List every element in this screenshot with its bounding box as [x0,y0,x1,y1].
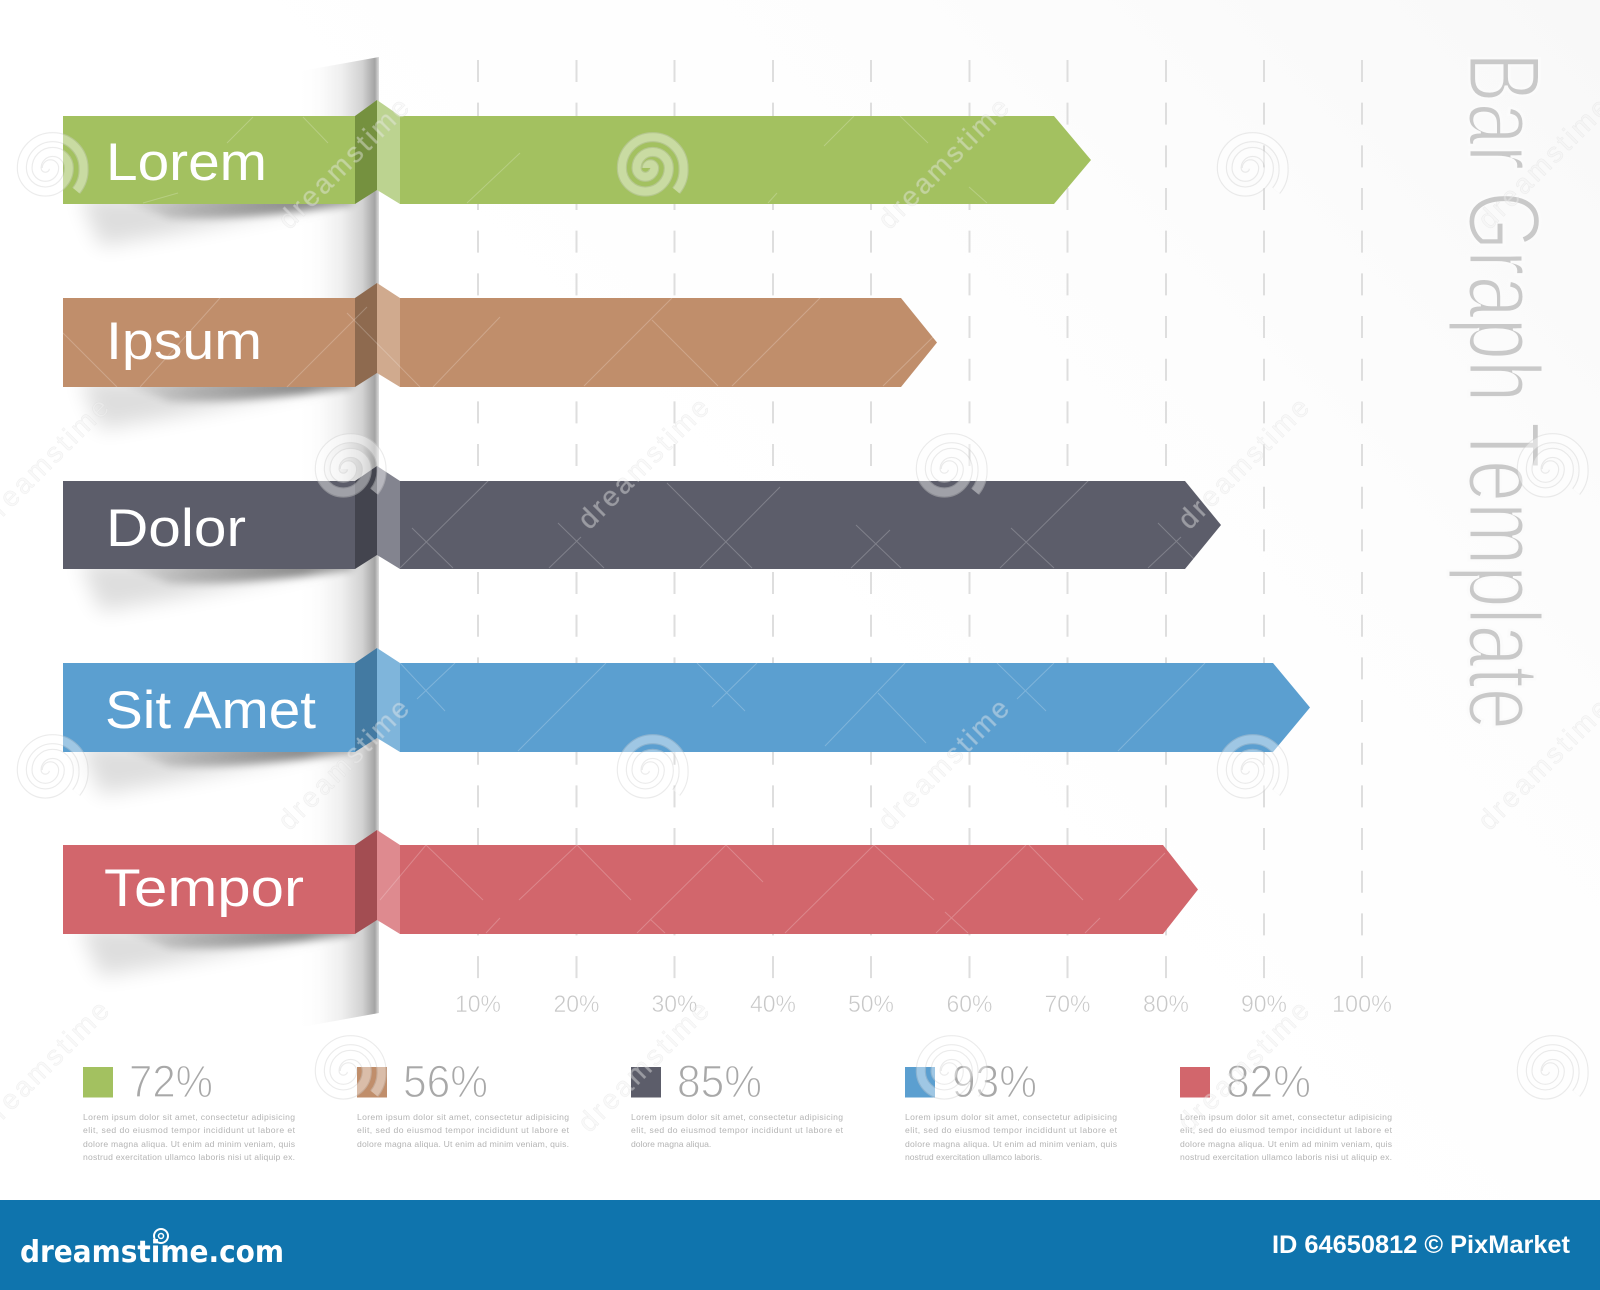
bar: Tempor 82%: Tempor [104,859,304,918]
watermark spirals and text: dreamstime [572,392,715,535]
footer band [0,1200,1600,1290]
watermark spirals and text: dreamstime [272,693,415,836]
legend: 72%: elit, sed do eiusmod tempor incididunt ut labore et [83,1125,296,1135]
bar: Tempor 82% [63,830,1198,976]
legend: 82%: nostrud exercitation ullamco laboris nisi ut aliquip ex. [1180,1152,1392,1162]
legend: 56% [357,1056,570,1149]
axis labels: 20% [554,991,600,1018]
bar: Dolor 85%: Dolor [106,499,246,558]
legend: 93%: nostrud exercitation ullamco laboris. [905,1152,1042,1162]
axis labels: 30% [652,991,698,1018]
legend: 72%: dolore magna aliqua. Ut enim ad minim veniam, quis [83,1139,295,1149]
legend: 93%: 93% [952,1056,1037,1107]
bar: Sit Amet 93% [63,648,1310,794]
legend: 85%: 85% [677,1056,762,1107]
axis labels: 60% [946,991,992,1018]
axis labels: 50% [848,991,894,1018]
legend: 85%: elit, sed do eiusmod tempor incididunt ut labore et [631,1125,844,1135]
watermark spirals and text: dreamstime [572,995,715,1138]
legend: 72%: nostrud exercitation ullamco laboris nisi ut aliquip ex. [83,1152,295,1162]
legend: 82%: dolore magna aliqua. Ut enim ad minim veniam, quis [1180,1139,1392,1149]
legend: 56%: dolore magna aliqua. Ut enim ad minim veniam, quis. [357,1139,569,1149]
footer credit: ID 64650812 © PixMarket [1272,1231,1571,1259]
axis labels: 10% [455,991,501,1018]
watermark spirals and text: dreamstime [1172,995,1315,1138]
axis labels [455,991,1392,1018]
legend: 72% [83,1056,296,1162]
watermark spirals and text: dreamstime [272,92,415,235]
legend: 72%: Lorem ipsum dolor sit amet, consectetur adipisicing [83,1112,295,1122]
legend: 85%: Lorem ipsum dolor sit amet, consectetur adipisicing [631,1112,843,1122]
watermark spirals and text: dreamstime [1172,392,1315,535]
footer logo: dreamstime.com [20,1235,284,1270]
chart grid lines [478,60,1362,980]
legend: 82%: Lorem ipsum dolor sit amet, consectetur adipisicing [1180,1112,1392,1122]
legend: 72%: 72% [129,1056,213,1107]
watermark spirals and text: dreamstime [872,693,1015,836]
legend: 93% [905,1056,1118,1162]
legend: 85%: dolore magna aliqua. [631,1139,711,1149]
page fold spine [296,57,379,1028]
legend: 93%: Lorem ipsum dolor sit amet, consectetur adipisicing [905,1112,1117,1122]
legend: 93%: dolore magna aliqua. Ut enim ad minim veniam, quis [905,1139,1117,1149]
legend: 56%: elit, sed do eiusmod tempor incididunt ut labore et [357,1125,570,1135]
axis labels: 40% [750,991,796,1018]
legend: 56%: 56% [403,1056,488,1107]
axis labels: 80% [1143,991,1189,1018]
bar: Ipsum 56%: Ipsum [106,312,262,371]
legend: 93%: elit, sed do eiusmod tempor incididunt ut labore et [905,1125,1118,1135]
axis labels: 100% [1332,991,1392,1018]
axis labels: 90% [1241,991,1287,1018]
legend: 85% [631,1056,844,1149]
bar: Lorem 72%: Lorem [106,133,267,192]
legend: 82%: 82% [1226,1056,1311,1107]
title: Bar Graph Template [1447,52,1561,730]
bar: Dolor 85% [63,466,1221,611]
legend: 82% [1180,1056,1393,1162]
watermark diagonal lines [63,116,1205,933]
bar: Lorem 72% [63,100,1091,246]
legend: 56%: Lorem ipsum dolor sit amet, consectetur adipisicing [357,1112,569,1122]
bar: Ipsum 56% [63,283,937,429]
legend: 82%: elit, sed do eiusmod tempor incididunt ut labore et [1180,1125,1393,1135]
watermark spirals and text: dreamstime [872,92,1015,235]
axis labels: 70% [1044,991,1090,1018]
bar: Sit Amet 93%: Sit Amet [105,681,316,740]
